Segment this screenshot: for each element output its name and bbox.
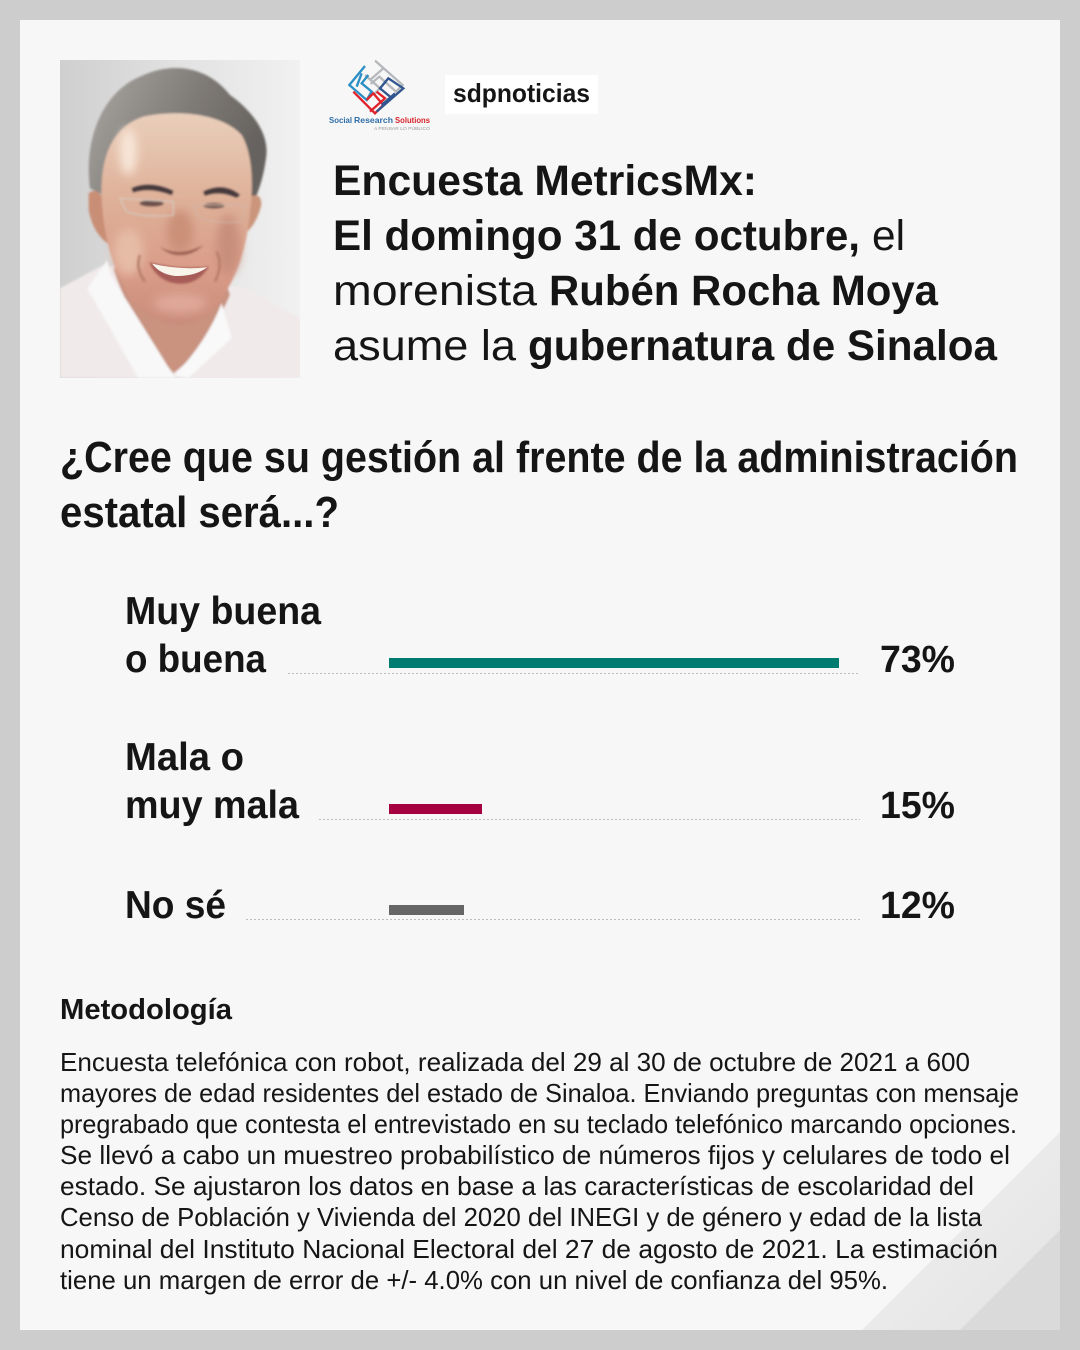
row: Muy buena o buena 73%: 73% — [880, 639, 955, 681]
row: Muy buena o buena 73% — [125, 590, 955, 681]
logo: Social Research Solutions: Social — [329, 115, 352, 125]
title: El domingo 31 de octubre, — [333, 212, 860, 260]
methodology text: tiene un margen de error de +/- 4.0% con un nivel de confianza del 95%. — [60, 1265, 888, 1295]
methodology text: Encuesta telefónica con robot, realizada del 29 al 30 de octubre de 2021 a 600 — [60, 1047, 970, 1077]
row: No sé 12%: No sé — [125, 884, 226, 927]
row: Muy buena o buena 73%: Muy buena — [125, 590, 321, 633]
question heading — [60, 433, 1018, 537]
title: asume la — [333, 322, 516, 370]
logo: Social Research Solutions: Solutions — [395, 115, 430, 125]
row: Mala o muy mala 15%: 15% — [880, 785, 955, 827]
title: Encuesta MetricsMx: — [333, 157, 757, 205]
question heading: estatal será...? — [60, 488, 339, 537]
row: No sé 12%: 12% — [880, 885, 955, 927]
row: Mala o muy mala 15% — [125, 736, 955, 827]
methodology text: mayores de edad residentes del estado de Sinaloa. Enviando preguntas con mensaje — [60, 1078, 1019, 1108]
row: Muy buena o buena 73%: o buena — [125, 638, 266, 681]
logo: Social Research Solutions: Research — [354, 115, 393, 125]
methodology heading: Metodología — [60, 994, 233, 1026]
title: morenista — [333, 267, 537, 315]
methodology text: estado. Se ajustaron los datos en base a las características de escolaridad del — [60, 1171, 974, 1201]
logo: sdpnoticias: sdpnoticias — [453, 78, 590, 108]
methodology text — [60, 1047, 1019, 1295]
logo: Social Research Solutions — [329, 61, 431, 131]
bar chart: survey results — [125, 590, 955, 927]
row: No sé 12% — [125, 884, 955, 927]
row: Mala o muy mala 15%: muy mala — [125, 784, 299, 827]
methodology text: pregrabado que contesta el entrevistado en su teclado telefónico marcando opciones. — [60, 1109, 1017, 1139]
photo: portrait of Rubén Rocha Moya — [60, 60, 300, 378]
title: Rubén Rocha Moya — [549, 267, 939, 315]
methodology text: Se llevó a cabo un muestreo probabilístico de números fijos y celulares de todo el — [60, 1140, 1010, 1170]
logo: Social Research Solutions: A PENSAR LO PÚBLICO — [374, 125, 431, 131]
methodology text: Censo de Población y Vivienda del 2020 del INEGI y de género y edad de la lista — [60, 1202, 983, 1232]
methodology text: nominal del Instituto Nacional Electoral del 27 de agosto de 2021. La estimación — [60, 1234, 998, 1264]
row: Mala o muy mala 15%: Mala o — [125, 736, 244, 779]
title: el — [872, 212, 905, 260]
title: gubernatura de Sinaloa — [528, 322, 998, 370]
title — [333, 157, 998, 370]
